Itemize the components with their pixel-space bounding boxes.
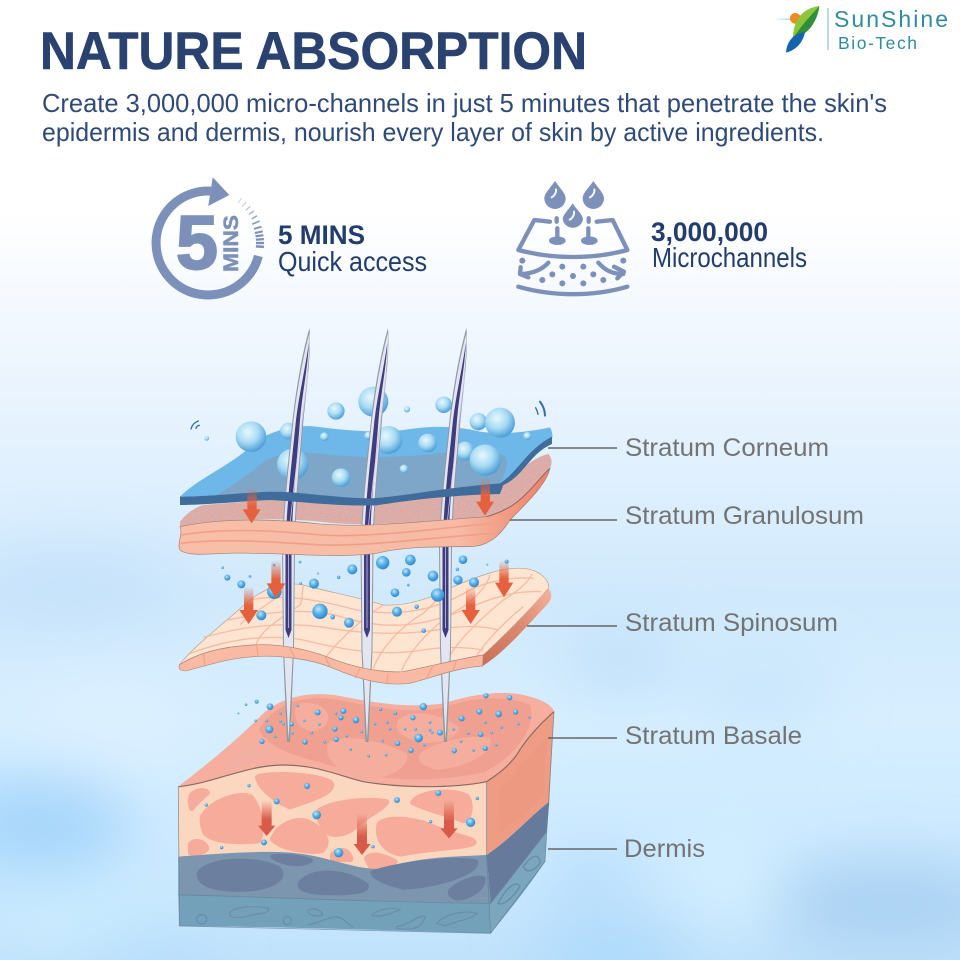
stat heading: 5 MINS <box>278 220 365 250</box>
block side faces <box>487 712 554 855</box>
stat: microchannels <box>518 181 807 294</box>
block lower band <box>178 895 491 933</box>
arrows: absorption direction <box>239 478 513 855</box>
skin diagram <box>178 328 554 933</box>
stat caption: Quick access <box>278 246 427 277</box>
logo icon: hummingbird <box>773 6 819 53</box>
icon: 5 minute clock: 5 <box>176 201 218 286</box>
layer: stratum granulosum band <box>179 468 550 556</box>
logo name: SunShine <box>834 6 948 32</box>
icon: skin microchannels <box>518 181 627 294</box>
icon: 5 minute clock <box>156 177 264 295</box>
subtitle <box>42 88 887 147</box>
front bubble <box>470 444 501 476</box>
labels <box>510 434 864 863</box>
stat heading: 3,000,000 <box>651 217 768 247</box>
label: stratum spinosum: Stratum Spinosum <box>625 609 838 637</box>
stat: 5 mins <box>156 177 427 295</box>
layer: stratum spinosum edge <box>179 588 551 684</box>
droplets on block <box>205 693 531 857</box>
layer: stratum corneum dark edge <box>180 437 552 506</box>
logo <box>773 6 948 53</box>
label: stratum corneum: Stratum Corneum <box>625 434 829 462</box>
layer: stratum basale block <box>178 693 554 933</box>
label: dermis: Dermis <box>624 835 705 863</box>
bubbles behind needles <box>204 387 531 487</box>
subtitle: Create 3,000,000 micro-channels in just 5 minutes that penetrate the skin's <box>42 88 887 118</box>
layer: stratum spinosum surface <box>179 568 548 672</box>
layer: stratum corneum surface <box>180 426 552 498</box>
droplets between layers <box>221 555 509 633</box>
icon: splash marks <box>191 402 545 429</box>
subtitle: epidermis and dermis, nourish every layer of skin by active ingredients. <box>42 117 824 147</box>
icon: 5 minute clock: MINS <box>220 215 243 272</box>
logo tagline: Bio-Tech <box>838 33 917 53</box>
label: stratum basale: Stratum Basale <box>625 722 802 750</box>
label: stratum granulosum: Stratum Granulosum <box>625 502 864 530</box>
needles <box>282 328 467 742</box>
block top surface <box>178 693 554 787</box>
stat caption: Microchannels <box>652 242 807 273</box>
layer: stratum granulosum speckled surface <box>180 454 552 527</box>
title: NATURE ABSORPTION <box>40 22 587 81</box>
block dermis band <box>178 852 491 903</box>
block front tissue <box>178 765 487 869</box>
